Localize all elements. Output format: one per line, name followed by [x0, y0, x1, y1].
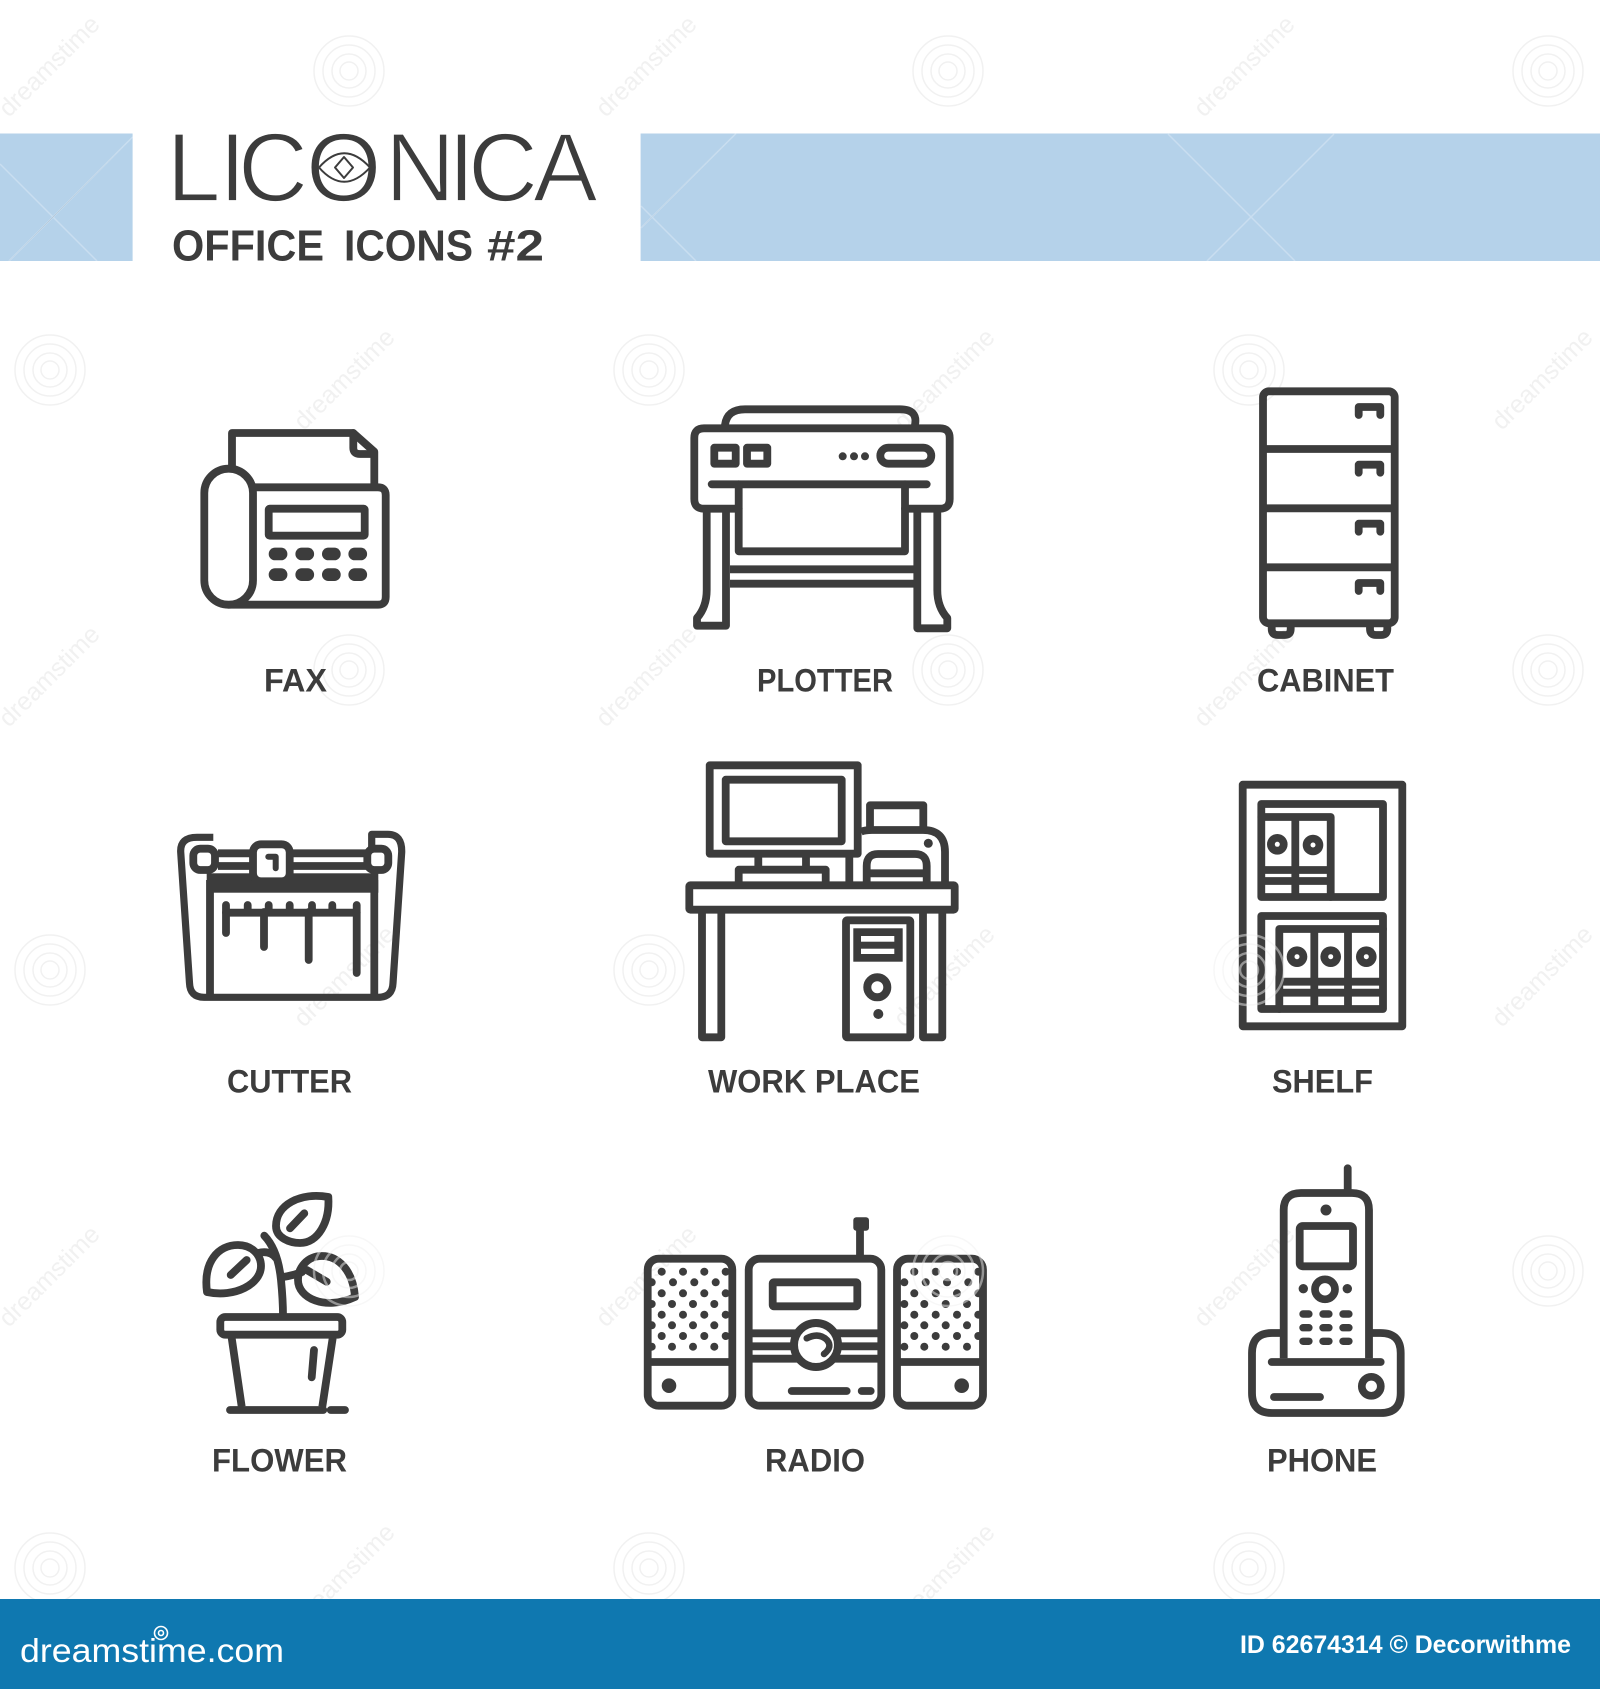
infographic canvas: dreamstime	[590, 10, 702, 122]
subtitle: ICONS	[344, 222, 473, 270]
subtitle	[172, 222, 544, 270]
label: radio: RADIO	[765, 1442, 865, 1478]
footer logo: dreamstime.com: dreamstime.com	[20, 1632, 284, 1669]
label: shelf: SHELF	[1272, 1064, 1373, 1100]
infographic canvas: dreamstime	[1188, 1220, 1300, 1332]
right speaker	[897, 1259, 983, 1406]
infographic canvas: dreamstime	[888, 920, 1000, 1032]
logo: LICONICA: LICONICA	[167, 113, 598, 222]
label: fax: FAX	[264, 662, 328, 698]
icon: plotter	[694, 409, 950, 628]
label: flower: FLOWER	[212, 1442, 347, 1478]
infographic canvas: dreamstime	[590, 1220, 702, 1332]
infographic canvas: dreamstime	[888, 323, 1000, 435]
left speaker	[648, 1259, 732, 1406]
label: cutter: CUTTER	[227, 1064, 352, 1100]
icon: work place	[689, 765, 955, 1037]
header band right	[641, 134, 1600, 261]
subtitle: #2	[487, 222, 544, 270]
icon: cutter	[181, 834, 402, 997]
icon: fax	[204, 433, 386, 605]
icon: footer spiral	[154, 1626, 168, 1640]
label: work place: WORK PLACE	[708, 1064, 920, 1100]
label: plotter: PLOTTER	[757, 662, 893, 698]
subtitle: OFFICE	[172, 222, 324, 270]
header band left	[0, 134, 133, 261]
infographic canvas: dreamstime	[590, 620, 702, 732]
icon: eye inside logo O	[319, 153, 370, 182]
infographic canvas: dreamstime	[1486, 920, 1598, 1032]
icon: shelf	[1243, 785, 1402, 1026]
icon: phone	[1252, 1168, 1401, 1413]
label: cabinet: CABINET	[1257, 662, 1394, 698]
center unit	[749, 1217, 881, 1406]
icon: cabinet	[1263, 391, 1395, 635]
label: phone: PHONE	[1267, 1442, 1377, 1478]
infographic canvas: dreamstime	[288, 1518, 400, 1630]
infographic canvas: dreamstime	[1188, 620, 1300, 732]
infographic canvas: dreamstime	[1188, 10, 1300, 122]
infographic canvas: dreamstime	[1486, 323, 1598, 435]
infographic canvas: dreamstime	[888, 1518, 1000, 1630]
infographic canvas: dreamstime	[288, 323, 400, 435]
footer bar	[0, 1599, 1600, 1689]
icon: flower	[206, 1196, 355, 1410]
infographic canvas: dreamstime	[288, 920, 400, 1032]
icon: radio	[648, 1217, 983, 1406]
footer credit: ID 62674314 © Decorwithme	[1240, 1631, 1571, 1659]
